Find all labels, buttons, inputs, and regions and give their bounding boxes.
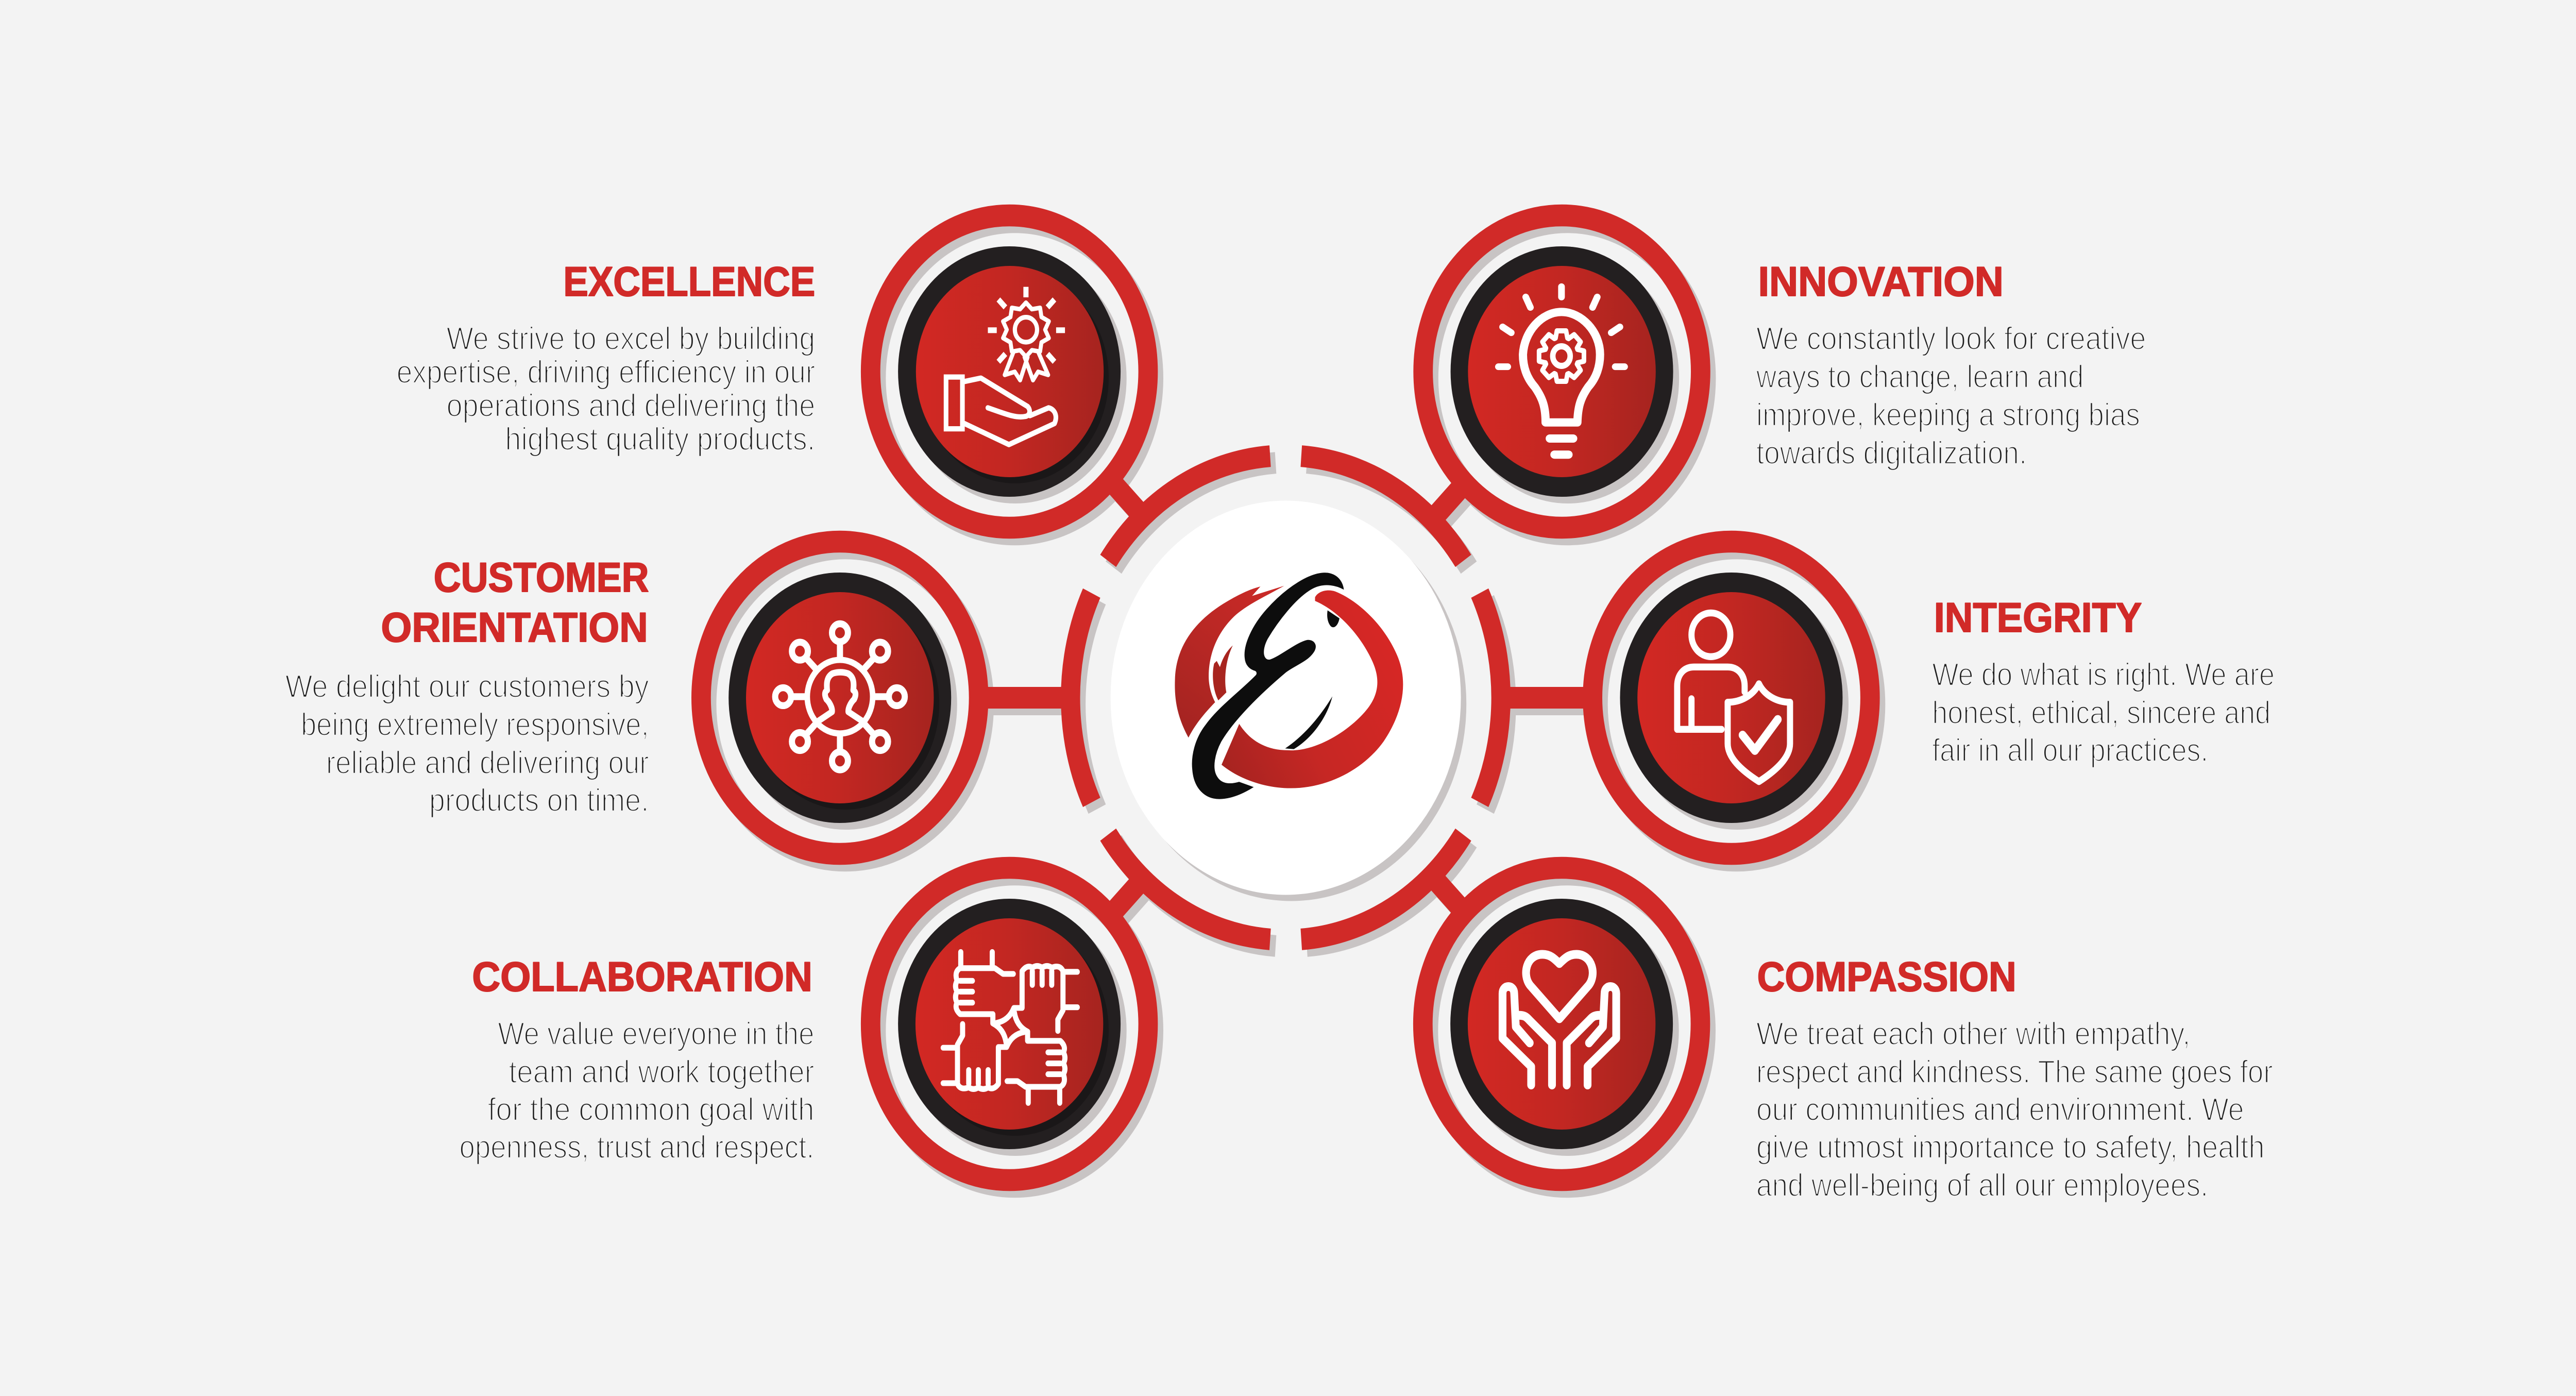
text block: integrity: fair in all our practices. bbox=[1932, 733, 2208, 768]
heading: customer orientation: CUSTOMER bbox=[434, 554, 649, 601]
connector spokes bbox=[979, 480, 1592, 915]
text block: innovation: improve, keeping a strong bias bbox=[1756, 397, 2140, 433]
text block: collaboration: for the common goal with bbox=[488, 1092, 814, 1128]
text block: customer orientation: reliable and delivering our bbox=[326, 745, 649, 781]
heading: innovation: INNOVATION bbox=[1758, 259, 2004, 305]
panel: excellence node bbox=[871, 215, 1148, 528]
red disk bbox=[1468, 918, 1655, 1130]
outer ring bbox=[1592, 542, 1870, 854]
white centre disk bbox=[1111, 501, 1461, 895]
text block: collaboration: team and work together bbox=[509, 1054, 814, 1090]
red disk bbox=[1468, 266, 1656, 477]
icon: person with shield bbox=[1677, 613, 1790, 782]
text block: customer orientation: being extremely responsive, bbox=[301, 707, 649, 743]
text block: collaboration: We value everyone in the bbox=[498, 1016, 814, 1052]
panel: integrity node bbox=[1592, 542, 1870, 854]
icon: company logo bbox=[1175, 570, 1403, 802]
heading: integrity: INTEGRITY bbox=[1934, 595, 2142, 641]
segmented outer ring bbox=[1071, 456, 1501, 939]
icon: hand with award bbox=[946, 287, 1065, 445]
text block: customer orientation bbox=[285, 669, 649, 818]
heading: customer orientation: ORIENTATION bbox=[381, 604, 648, 651]
icon: customer network bbox=[775, 624, 905, 770]
text block: compassion bbox=[1756, 1016, 2273, 1203]
text block: compassion: our communities and environment. We bbox=[1756, 1092, 2244, 1128]
text block: collaboration bbox=[460, 1016, 814, 1165]
text block: integrity: honest, ethical, sincere and bbox=[1932, 695, 2270, 731]
panel: customer orientation node bbox=[701, 542, 979, 854]
text block: integrity: We do what is right. We are bbox=[1932, 657, 2275, 693]
text block: excellence: operations and delivering the bbox=[447, 388, 815, 424]
text block: compassion: respect and kindness. The same goes for bbox=[1756, 1054, 2273, 1090]
text block: innovation: towards digitalization. bbox=[1756, 435, 2027, 471]
drop shadows bbox=[707, 222, 1875, 1187]
text block: excellence bbox=[397, 321, 815, 457]
text block: innovation bbox=[1756, 321, 2146, 471]
outer ring bbox=[871, 215, 1148, 528]
text block: excellence: expertise, driving efficiency in our bbox=[397, 355, 815, 390]
text block: innovation: ways to change, learn and bbox=[1756, 359, 2083, 395]
heading: compassion: COMPASSION bbox=[1757, 954, 2016, 1000]
black disk bbox=[898, 246, 1121, 497]
icon: hands holding heart bbox=[1502, 954, 1616, 1085]
heading: customer orientation bbox=[381, 554, 649, 651]
text block: innovation: We constantly look for creative bbox=[1756, 321, 2146, 357]
text block: excellence: highest quality products. bbox=[505, 422, 815, 457]
outer ring bbox=[701, 542, 979, 854]
black disk bbox=[1450, 899, 1673, 1149]
text block: customer orientation: products on time. bbox=[429, 783, 649, 818]
outer ring bbox=[871, 868, 1148, 1180]
text block: compassion: and well-being of all our employees. bbox=[1756, 1168, 2208, 1203]
outer ring bbox=[1423, 215, 1701, 528]
central hub bbox=[979, 456, 1592, 939]
text block: compassion: We treat each other with empathy, bbox=[1756, 1016, 2191, 1052]
black disk bbox=[898, 899, 1121, 1149]
black disk bbox=[1620, 573, 1842, 823]
panel: innovation node bbox=[1423, 215, 1701, 528]
icon: four interlocked hands bbox=[943, 952, 1077, 1103]
text block: excellence: We strive to excel by building bbox=[447, 321, 815, 357]
text block: compassion: give utmost importance to safety, health bbox=[1756, 1130, 2265, 1165]
panel: compassion node bbox=[1423, 868, 1700, 1180]
red disk bbox=[916, 918, 1103, 1130]
outer ring bbox=[1423, 868, 1700, 1180]
black disk bbox=[1451, 246, 1673, 497]
text block: integrity bbox=[1932, 657, 2275, 768]
text block: customer orientation: We delight our customers by bbox=[285, 669, 649, 704]
heading: excellence: EXCELLENCE bbox=[563, 259, 815, 305]
heading: collaboration: COLLABORATION bbox=[472, 954, 812, 1000]
red disk bbox=[746, 592, 934, 803]
text block: collaboration: openness, trust and respect. bbox=[460, 1130, 814, 1165]
black disk bbox=[728, 573, 951, 823]
icon: light bulb with gear bbox=[1498, 287, 1624, 455]
red disk bbox=[1637, 592, 1825, 803]
panel: collaboration node bbox=[871, 868, 1148, 1180]
red disk bbox=[916, 266, 1104, 477]
